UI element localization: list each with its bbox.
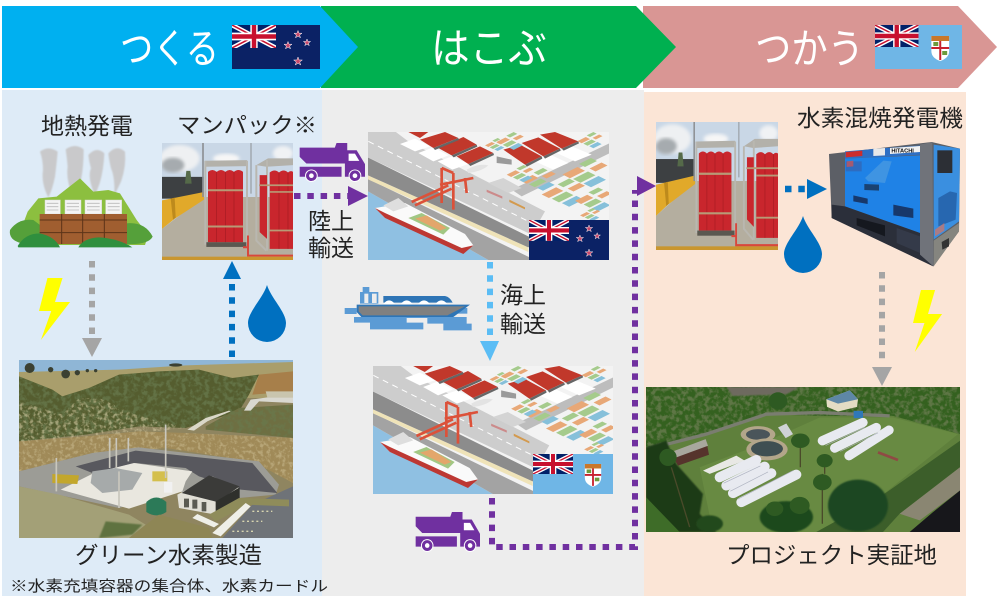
photo: manpack at use site <box>654 122 778 250</box>
panel: hakobu background <box>322 90 644 596</box>
icon: geothermal plant <box>10 146 153 248</box>
illustration: Fiji port <box>370 362 619 497</box>
illustration: generator <box>829 142 960 266</box>
flag: New Zealand port <box>529 220 609 260</box>
header arrow: hakobu: はこぶ <box>431 25 547 72</box>
flag: Fiji port <box>533 454 613 494</box>
arrow: sea transport <box>480 262 499 361</box>
arrow: manpack to port <box>294 186 368 206</box>
icon: lightning right <box>913 290 942 352</box>
illustration: NZ port <box>365 128 615 263</box>
arrow: geothermal to electrolysis <box>82 261 102 357</box>
arrow: hydrogen production to manpack <box>223 261 241 357</box>
header arrow: tsukuru: つくる <box>120 26 219 72</box>
label: geothermal: 地熱発電 <box>41 113 133 139</box>
label: sea transport: 海上 <box>500 282 546 308</box>
footnote: ※水素充填容器の集合体、水素カードル <box>10 578 328 595</box>
label: land transport: 輸送 <box>308 235 354 261</box>
panel: tsukuru background <box>2 90 322 596</box>
photo: green hydrogen production site <box>19 360 293 538</box>
header arrow: tsukuru <box>2 6 358 88</box>
photo: project demonstration site <box>646 387 960 532</box>
arrow: generator to site <box>872 272 892 386</box>
header arrow: hakobu <box>321 6 676 88</box>
label: land transport <box>308 208 354 261</box>
icon: truck land transport <box>300 143 365 182</box>
photo: manpack hydrogen cylinders <box>160 143 293 260</box>
header arrow: tsukau: つかう <box>755 26 864 72</box>
header arrow: tsukau <box>643 6 997 88</box>
flag: New Zealand header <box>232 25 320 69</box>
label: land transport: 陸上 <box>308 208 354 234</box>
icon: lightning left <box>39 278 70 340</box>
icon: ship <box>344 287 472 330</box>
label: sea transport: 輸送 <box>500 311 546 337</box>
illustration: generator: HITACHI <box>891 149 914 155</box>
label: sea transport <box>500 282 546 337</box>
label: project site: プロジェクト実証地 <box>726 542 937 568</box>
icon: hydrogen drop left <box>248 285 286 342</box>
icon: truck delivery <box>416 512 480 552</box>
arrow: Fiji port to use site <box>492 176 656 547</box>
label: manpack: マンパック※ <box>177 113 317 138</box>
label: green hydrogen production: グリーン水素製造 <box>75 542 262 568</box>
arrow: manpack to generator <box>785 179 827 199</box>
flag: Fiji header <box>875 25 962 69</box>
panel: tsukau background <box>644 92 966 596</box>
label: hydrogen co-firing generator: 水素混焼発電機 <box>797 105 963 131</box>
icon: hydrogen drop right <box>784 216 822 273</box>
